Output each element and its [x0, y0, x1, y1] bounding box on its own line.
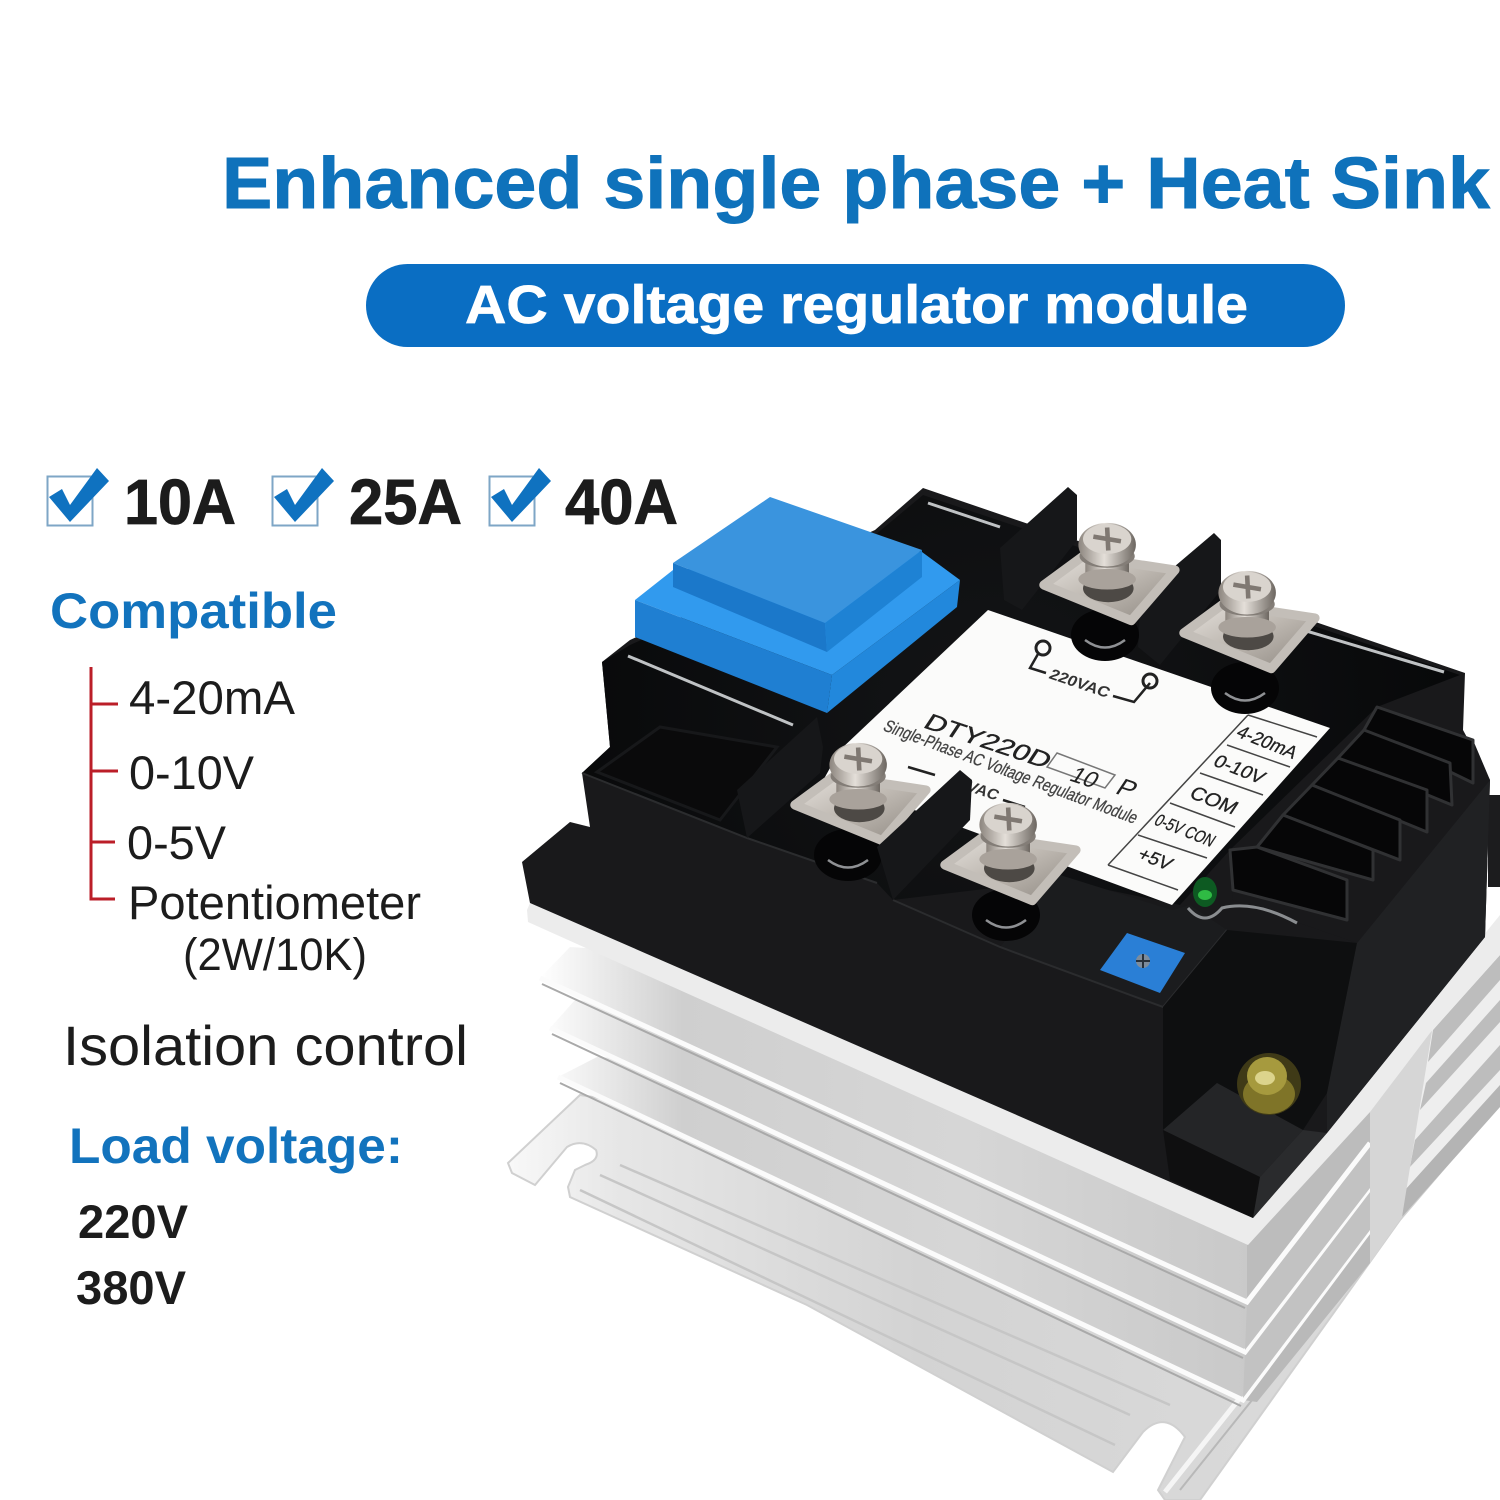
- control signal list: [127, 671, 421, 980]
- base plate grooves: [580, 1165, 1170, 1445]
- load voltage values: [76, 1195, 189, 1314]
- model current: 10: 10: [1065, 763, 1104, 793]
- top terminal marking: 220VAC: [1030, 641, 1157, 702]
- red bracket: [91, 667, 118, 899]
- grounding step: [1163, 1083, 1303, 1177]
- side connector stub: [1488, 795, 1500, 887]
- subtitle pill: [366, 264, 1345, 347]
- terminal table: +5V: [1133, 845, 1177, 875]
- regulator housing: [522, 487, 1500, 1218]
- potentiometer ledge: [1000, 875, 1227, 1007]
- base plate with mounting slots: [508, 1000, 1500, 1500]
- front barrier: [877, 770, 972, 900]
- end bar: [1370, 1025, 1433, 1263]
- fin 3: [558, 1057, 1370, 1406]
- checkbox: 10A: [48, 468, 109, 526]
- terminal screw 4: [945, 803, 1076, 901]
- bottom terminal marking: [908, 767, 1025, 807]
- rear fin section: [1402, 955, 1500, 1217]
- blue transformer: [635, 497, 960, 713]
- rating: 40A: 40A: [565, 466, 678, 538]
- terminal screw 2: [1184, 571, 1315, 669]
- terminal table: [1108, 715, 1317, 890]
- fin 2: [550, 1000, 1370, 1398]
- load voltage values: 380V: [76, 1261, 187, 1314]
- front wall edge: [582, 773, 1227, 1007]
- rating: 25A: 25A: [349, 466, 462, 538]
- terminal table: 4-20mA: [1232, 723, 1302, 763]
- heading: load voltage: Load voltage:: [69, 1118, 403, 1174]
- gloss recess: [597, 727, 777, 820]
- control signal list: 0-10V: [129, 746, 255, 799]
- terminal table: 0-5V CON: [1151, 811, 1219, 850]
- terminal posts: [814, 609, 1279, 941]
- current ratings: [48, 466, 678, 538]
- grounding screw: [1237, 1053, 1301, 1115]
- terminal barriers: [737, 487, 1221, 838]
- control signal list: 0-5V: [127, 816, 227, 869]
- isolation control: Isolation control: [63, 1014, 468, 1077]
- terminal screw 3: [795, 743, 926, 841]
- model number: DTY220D: [919, 710, 1057, 774]
- fin 1: [540, 947, 1370, 1350]
- right outer face: [1327, 780, 1490, 1133]
- checkbox: 25A: [272, 468, 334, 526]
- green LED: [1188, 877, 1297, 923]
- subtitle pill: AC voltage regulator module: [465, 275, 1248, 335]
- blue trim potentiometer: [1100, 933, 1185, 993]
- right block: [1163, 930, 1357, 1130]
- heading: compatible: Compatible: [50, 583, 337, 639]
- product photo: voltage regulator on heat sink: [508, 487, 1500, 1500]
- control signal list: Potentiometer: [128, 876, 421, 929]
- terminal screw 1: [1044, 523, 1175, 621]
- rear lip highlights: [628, 503, 1444, 725]
- load voltage values: 220V: [78, 1195, 189, 1248]
- checkbox: 40A: [490, 468, 551, 526]
- model suffix: P: P: [1111, 773, 1144, 804]
- top surface: [582, 495, 1460, 905]
- product description: Single-Phase AC Voltage Regulator Module: [880, 716, 1142, 827]
- product label: [825, 610, 1330, 905]
- terminal table: COM: [1185, 783, 1242, 819]
- top plate: [527, 903, 1500, 1245]
- housing silhouette: [522, 488, 1490, 1218]
- heat sink: [508, 903, 1500, 1500]
- title: Enhanced single phase + Heat Sink: [222, 144, 1491, 224]
- control signal list: (2W/10K): [183, 929, 367, 980]
- control signal list: 4-20mA: [129, 671, 296, 724]
- bottom terminal marking: VAC: [963, 779, 1002, 804]
- rating: 10A: 10A: [124, 466, 236, 538]
- terminal table: 0-10V: [1209, 752, 1270, 789]
- top terminal marking: 220VAC: 220VAC: [1046, 667, 1113, 701]
- ventilated comb: [1230, 707, 1490, 943]
